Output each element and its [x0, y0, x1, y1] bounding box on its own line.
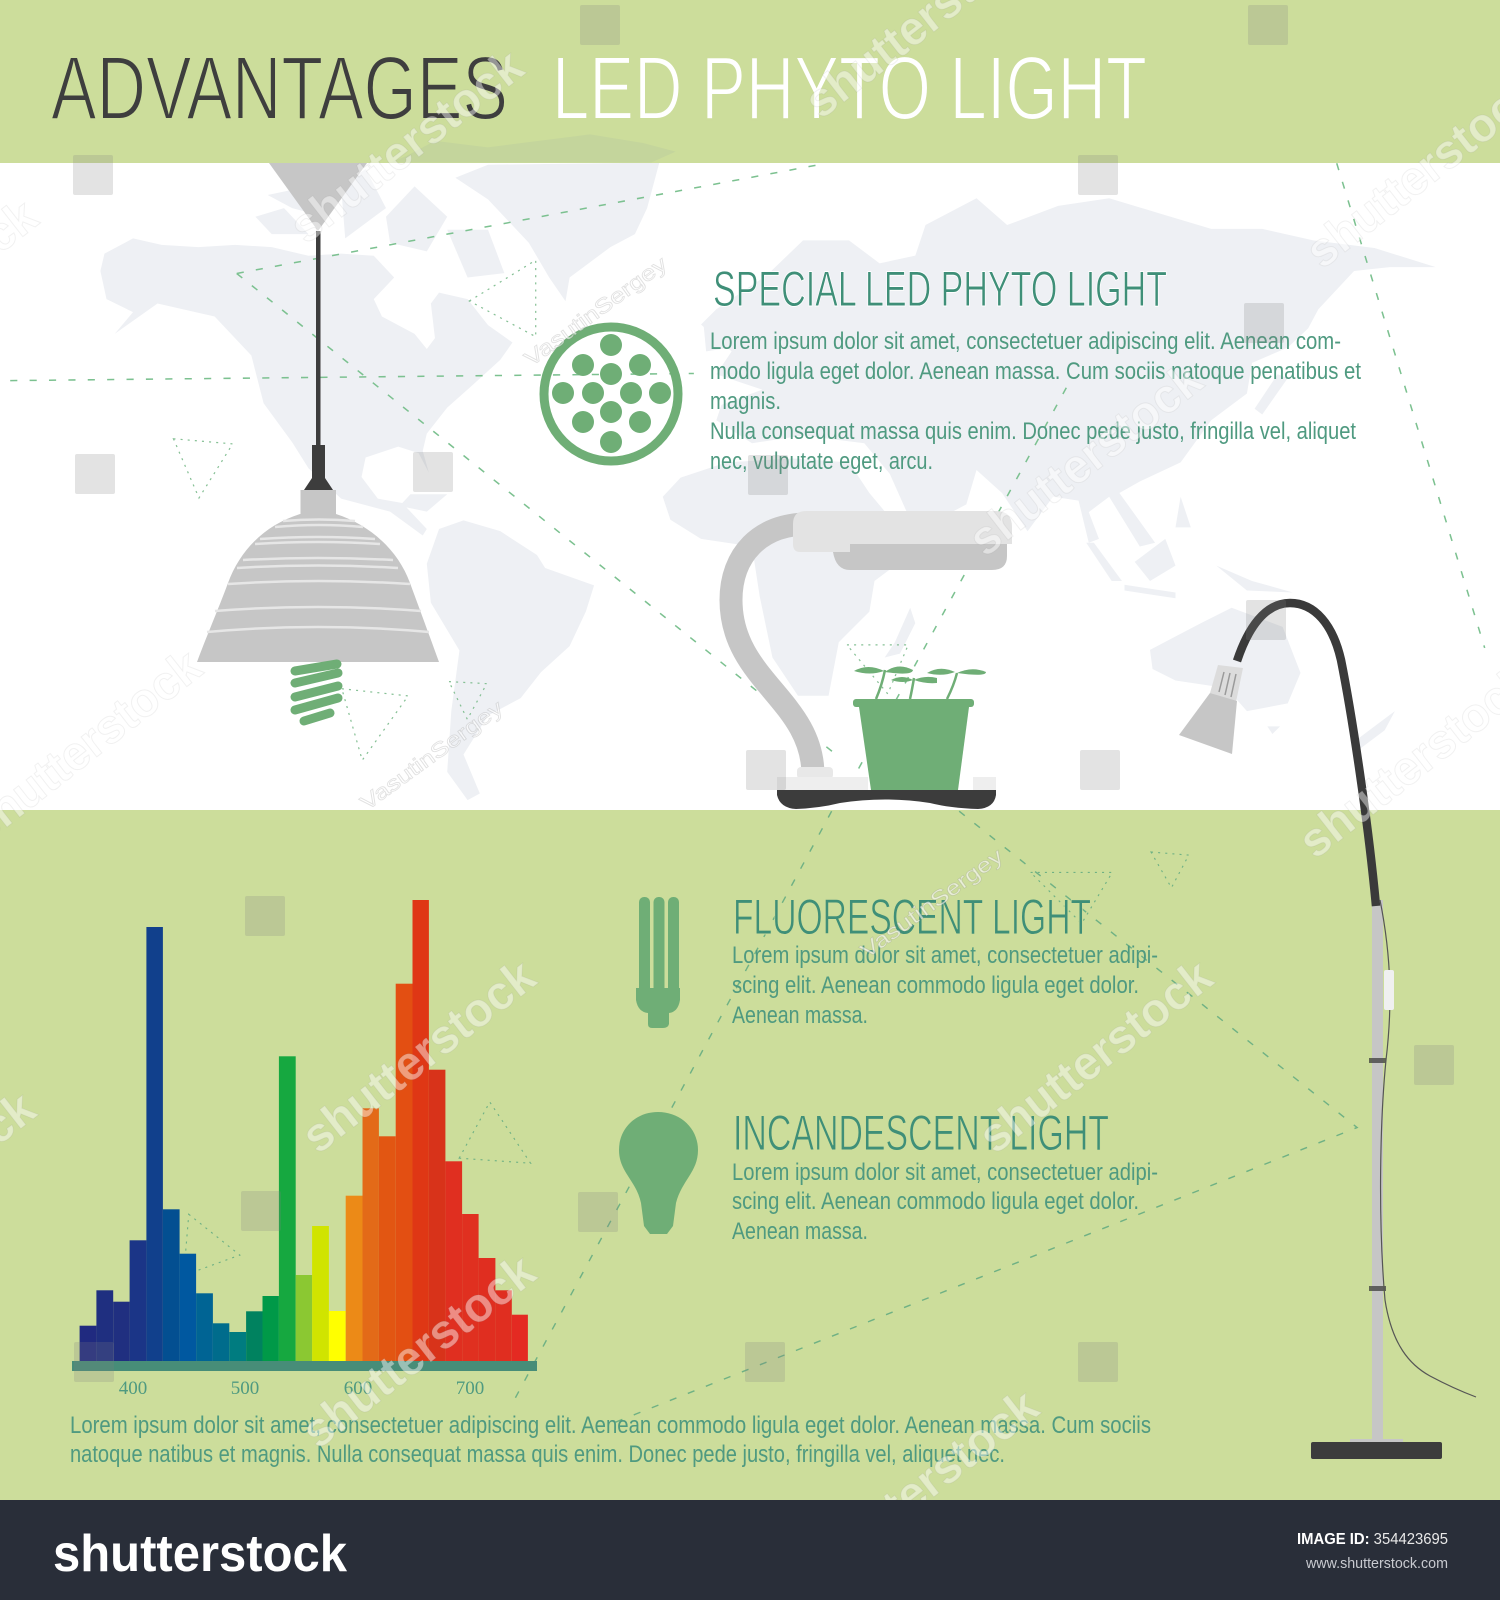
stock watermark overlay: shutterstock	[969, 949, 1223, 1164]
text block: fluorescent description: scing elit. Aenean commodo ligula eget dolor.	[732, 972, 1139, 999]
spectrum bar chart: 400	[119, 1378, 147, 1399]
title	[51, 39, 1147, 139]
text block: incandescent description: scing elit. Aenean commodo ligula eget dolor.	[732, 1188, 1139, 1215]
text block: special LED description: nec, vulputate eget, arcu.	[710, 448, 933, 475]
text block: special LED description: Nulla consequat massa quis enim. Donec pede justo, fringilla vel, aliquet	[710, 418, 1356, 445]
text block: bottom caption	[70, 1412, 1151, 1468]
header band	[0, 0, 1500, 163]
desk lamp	[731, 511, 1012, 809]
text block: fluorescent description	[732, 942, 1158, 1029]
icon: spiral bulb	[295, 664, 338, 721]
text block: bottom caption: Lorem ipsum dolor sit amet, consectetuer adipiscing elit. Aenean commodo ligula eget dolor. Aenean massa. Cum sociis	[70, 1412, 1151, 1439]
text block: incandescent description: Aenean massa.	[732, 1218, 868, 1245]
stock watermark overlay: shutterstock	[959, 352, 1213, 567]
spectrum bar chart: 600	[344, 1378, 372, 1399]
stock watermark overlay: shutterstock	[292, 1244, 546, 1459]
heading: special LED phyto light: SPECIAL LED PHYTO LIGHT	[713, 261, 1167, 317]
text block: fluorescent description: Lorem ipsum dolor sit amet, consectetuer adipi-	[732, 942, 1158, 969]
text block: special LED description: Lorem ipsum dolor sit amet, consectetuer adipiscing elit. Aenean com-	[710, 328, 1341, 355]
floor lamp	[1179, 603, 1476, 1459]
text block: bottom caption: natoque natibus et magnis. Nulla consequat massa quis enim. Donec pede justo, fringilla vel, aliquet nec.	[70, 1441, 1005, 1468]
spectrum bar chart: 700	[456, 1378, 484, 1399]
footer bar: IMAGE ID: 354423695	[1297, 1531, 1448, 1548]
stock watermark overlay: VasutinSergey	[520, 252, 672, 371]
hanging ceiling lamp	[197, 163, 439, 662]
stock watermark overlay: shutterstock	[292, 949, 546, 1164]
heading: incandescent light: INCANDESCENT LIGHT	[733, 1105, 1109, 1161]
lower green panel	[0, 810, 1500, 1500]
title: LED PHYTO LIGHT	[552, 39, 1147, 139]
text block: special LED description: magnis.	[710, 388, 781, 415]
text block: incandescent description: Lorem ipsum dolor sit amet, consectetuer adipi-	[732, 1159, 1158, 1186]
icon: fluorescent bulb	[636, 897, 680, 1028]
footer bar	[0, 1500, 1500, 1600]
spectrum bar chart	[72, 900, 537, 1399]
text block: incandescent description	[732, 1159, 1158, 1245]
icon: LED array	[544, 327, 678, 461]
world map background	[100, 163, 1436, 800]
stock watermark overlay: VasutinSergey	[356, 696, 508, 815]
heading: fluorescent light: FLUORESCENT LIGHT	[733, 889, 1091, 945]
icon: incandescent bulb	[619, 1112, 698, 1234]
spectrum bar chart: 500	[231, 1378, 259, 1399]
stock watermark overlay: shutterstock	[280, 39, 534, 254]
stock watermark overlay: shutterstock	[795, 1379, 1049, 1594]
dashed connector lines	[10, 163, 1485, 1398]
stock watermark overlay: VasutinSergey	[856, 844, 1008, 963]
plant pot with seedlings	[853, 666, 986, 790]
footer bar: www.shutterstock.com	[1305, 1555, 1448, 1572]
footer bar: shutterstock	[53, 1525, 347, 1583]
lower dashed lines over the panel	[184, 811, 1357, 1423]
dotted triangles	[173, 260, 908, 760]
text block: fluorescent description: Aenean massa.	[732, 1002, 868, 1029]
text block: special LED description: modo ligula eget dolor. Aenean massa. Cum sociis natoque penatibus et	[710, 358, 1361, 385]
title: ADVANTAGES	[51, 39, 508, 139]
text block: special LED description	[710, 328, 1361, 475]
